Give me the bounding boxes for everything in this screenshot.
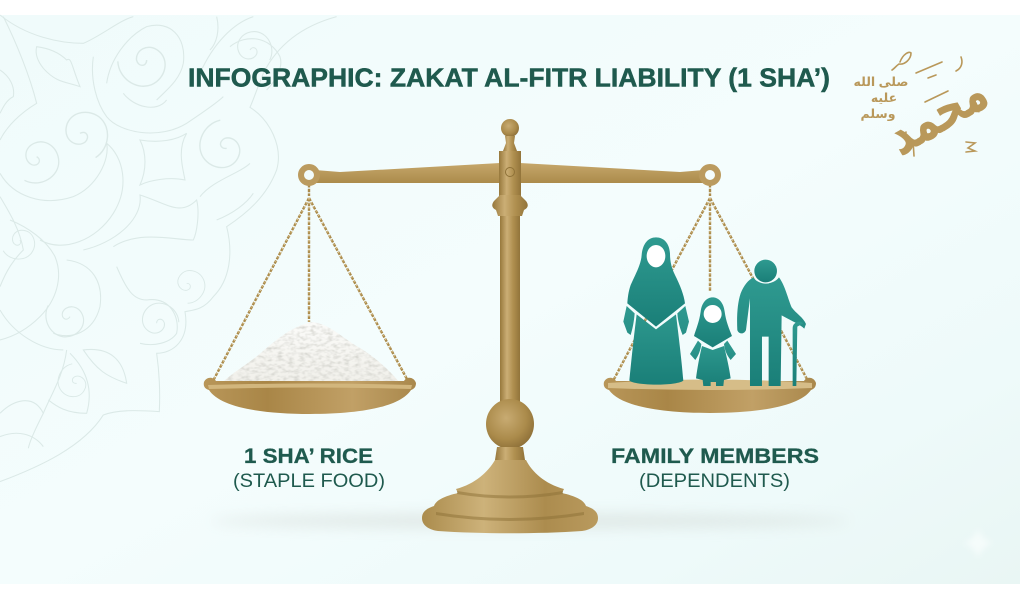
calligraphy: blessing <box>854 75 908 121</box>
faint sparkle <box>963 528 993 558</box>
family figures <box>623 237 806 386</box>
right label: sub: (DEPENDENTS) <box>639 470 790 492</box>
right pan <box>604 378 816 413</box>
left chains <box>213 184 408 381</box>
calligraphy: name: محمد <box>875 60 999 168</box>
ball knop <box>486 399 534 449</box>
rice pile <box>218 322 403 387</box>
calligraphy: Muhammad emblem <box>854 52 999 168</box>
central post <box>422 119 598 533</box>
calligraphy: blessing: عليه <box>871 91 897 105</box>
left pan <box>204 378 416 414</box>
calligraphy: blessing: وسلم <box>861 107 895 121</box>
left label <box>233 444 385 492</box>
beam <box>301 163 718 183</box>
calligraphy: accent strokes <box>892 52 982 156</box>
right chains <box>613 184 808 381</box>
right label: main: FAMILY MEMBERS <box>611 444 819 468</box>
calligraphy: blessing: صلى الله <box>854 75 908 89</box>
figure: child <box>690 297 736 386</box>
finial <box>501 119 519 151</box>
left label: sub: (STAPLE FOOD) <box>233 470 385 492</box>
left label: main: 1 SHA’ RICE <box>244 444 373 468</box>
base <box>422 447 598 533</box>
figure: woman <box>623 237 689 385</box>
shaft <box>500 216 520 402</box>
title: INFOGRAPHIC: ZAKAT AL-FITR LIABILITY (1 SHA’) <box>188 64 830 92</box>
pivot block <box>499 151 521 196</box>
balance scale <box>204 119 816 533</box>
right label <box>611 444 819 492</box>
decorative arabesque ornament <box>0 15 337 482</box>
collar <box>492 195 528 216</box>
ground shadow <box>210 514 850 528</box>
figure: elderly man <box>737 258 806 386</box>
